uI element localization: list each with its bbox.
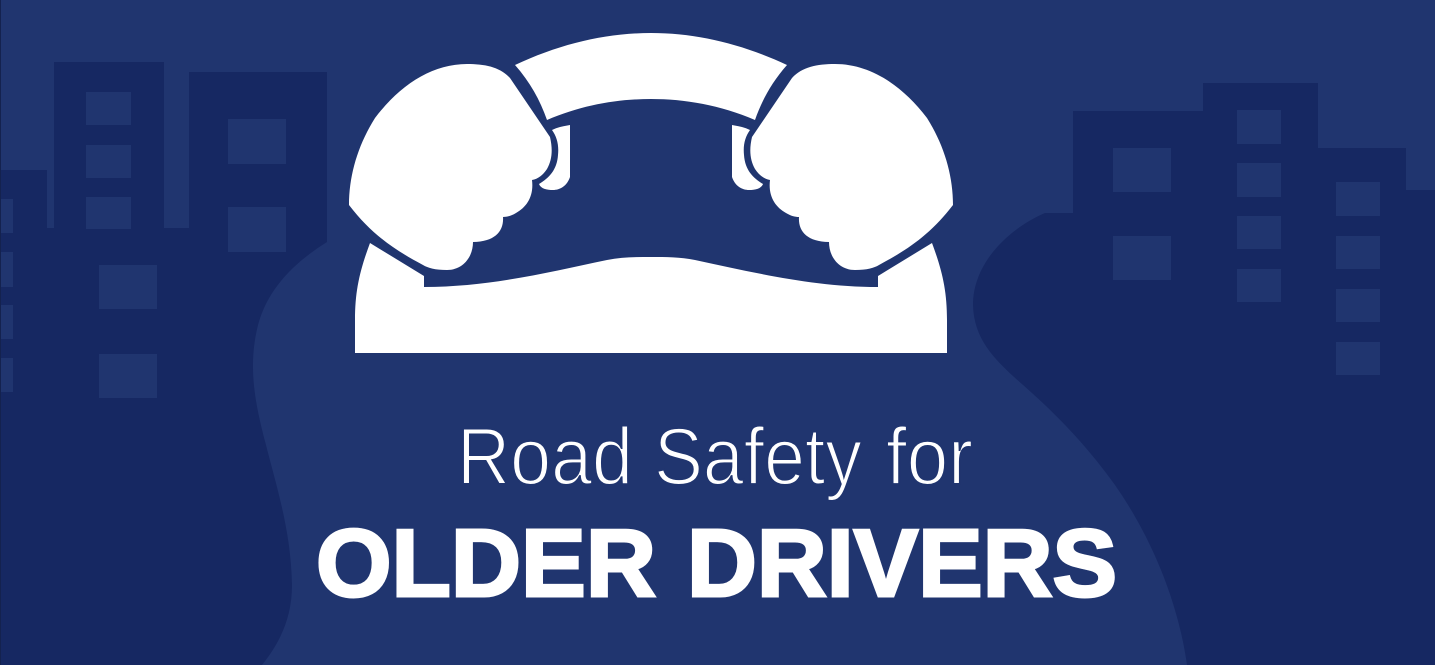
steering wheel top arc bbox=[515, 33, 787, 120]
steering wheel base bbox=[355, 243, 947, 353]
title: Road Safety for bbox=[457, 412, 973, 502]
left hand bbox=[349, 64, 570, 270]
title: OLDER DRIVERS bbox=[316, 510, 1117, 617]
title: OLDER DRIVERS: DRIVERS bbox=[687, 510, 1117, 617]
title: Road Safety for: Safety bbox=[654, 412, 862, 502]
title: Road Safety for: for bbox=[886, 412, 973, 502]
icon: hands gripping a steering wheel bbox=[349, 33, 953, 353]
left city skyline with buildings and road edge bbox=[1, 62, 327, 665]
right hand bbox=[732, 64, 953, 270]
title: Road Safety for: Road bbox=[457, 412, 633, 502]
title: OLDER DRIVERS: OLDER bbox=[316, 510, 656, 617]
right city skyline with buildings and road edge bbox=[973, 83, 1435, 665]
